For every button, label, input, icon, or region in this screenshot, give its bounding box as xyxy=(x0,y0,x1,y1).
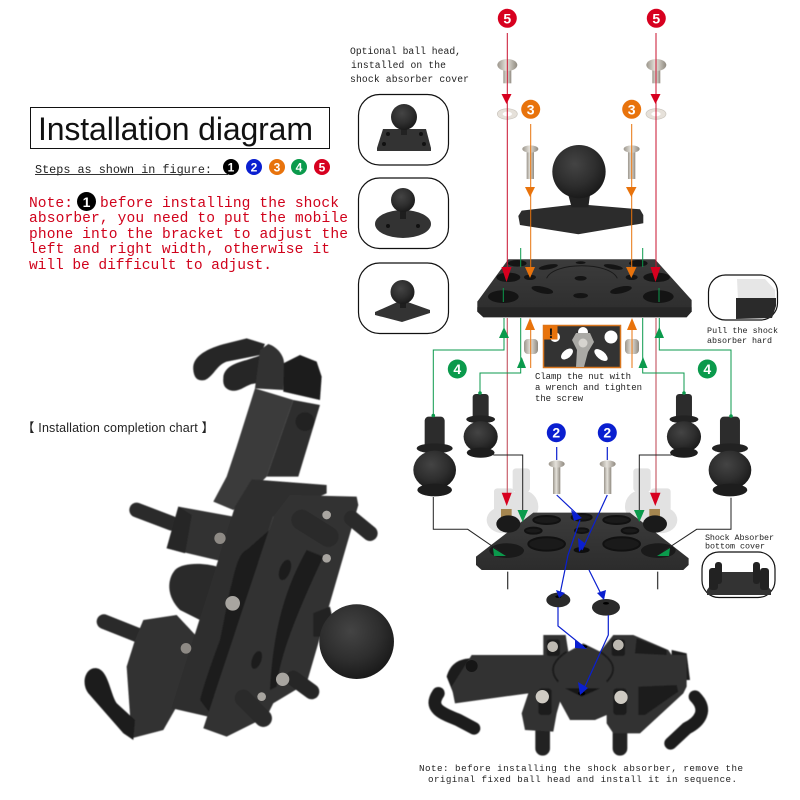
step badges on diagram: 5 xyxy=(652,10,660,26)
clamp nut caption xyxy=(535,372,642,404)
insert: shock absorber bottom cover: Shock Absorber xyxy=(705,533,774,543)
red installation note: phone into the bracket to adjust the xyxy=(29,227,348,243)
step badges on diagram: 4 xyxy=(453,361,461,377)
step badges on diagram: 2 xyxy=(603,425,611,441)
silver screws xyxy=(181,511,331,701)
ball head option: round base xyxy=(358,178,448,248)
step badges on diagram xyxy=(448,9,717,442)
red installation note: left and right width, otherwise it xyxy=(29,242,330,258)
ball head option: diamond base xyxy=(358,263,448,334)
step 2 screws xyxy=(549,460,616,494)
ghost dampers xyxy=(487,468,677,533)
step badges on diagram: 5 xyxy=(503,10,511,26)
red installation note: absorber, you need to put the mobile xyxy=(29,211,348,227)
top mounting plate xyxy=(477,259,692,317)
step badges on diagram: 2 xyxy=(552,425,560,441)
optional ball head caption: installed on the xyxy=(351,60,446,71)
insert: pull the shock absorber hard: absorber hard xyxy=(707,336,772,346)
steps legend: 2 xyxy=(251,160,258,174)
optional ball head caption: shock absorber cover xyxy=(350,74,469,85)
red installation note xyxy=(29,192,348,274)
steps legend: Steps as shown in figure: xyxy=(35,163,212,177)
insert: pull the shock absorber hard xyxy=(707,275,778,346)
rubber dampers xyxy=(413,394,751,496)
arrows: step 2 blue xyxy=(556,447,608,695)
red installation note: will be difficult to adjust. xyxy=(29,258,272,274)
optional ball head caption xyxy=(350,46,469,85)
clamp nut caption: the screw xyxy=(535,394,584,404)
insert: wrench on nut: ! xyxy=(549,325,553,341)
bottom note: Note: before installing the shock absorber, remove the xyxy=(419,763,743,774)
step badges on diagram: 3 xyxy=(527,101,535,117)
insert: shock absorber bottom cover xyxy=(702,533,775,598)
red installation note: 1 xyxy=(83,194,91,210)
steps legend: 5 xyxy=(319,160,326,174)
large ball head xyxy=(518,145,643,234)
optional ball head caption: Optional ball head, xyxy=(350,46,461,57)
rubber washers xyxy=(546,593,620,616)
insert: pull the shock absorber hard: Pull the shock xyxy=(707,326,778,336)
steps legend xyxy=(35,159,330,177)
insert: wrench on nut xyxy=(544,325,620,368)
ball head option: square base xyxy=(358,94,448,165)
step badges on diagram: 3 xyxy=(628,101,636,117)
arrows: step 3 orange xyxy=(525,124,637,368)
phone holder bracket, rear view xyxy=(435,635,702,748)
step badges on diagram: 4 xyxy=(703,361,711,377)
steps legend: 3 xyxy=(274,160,281,174)
panel: optional ball heads xyxy=(350,46,469,334)
arrows: step 4 green xyxy=(432,248,733,418)
arrows: step 5 red xyxy=(502,33,660,506)
brass standoffs and nuts xyxy=(496,509,667,533)
arrows: dampers to bottom plate xyxy=(433,455,731,556)
silver screws xyxy=(466,640,628,704)
photo: assembled phone holder xyxy=(85,338,394,740)
title: Installation diagram xyxy=(38,111,313,147)
steps legend: 1 xyxy=(228,160,235,174)
completion chart caption: 【 Installation completion chart 】 xyxy=(22,421,214,435)
shock absorber bottom plate xyxy=(476,509,689,589)
clamp nut caption: Clamp the nut with xyxy=(535,372,631,382)
soft blurred body xyxy=(85,338,370,740)
steps legend: 4 xyxy=(296,160,303,174)
red installation note: Note: xyxy=(29,196,73,212)
bottom note xyxy=(419,763,743,785)
clamp nut caption: a wrench and tighten xyxy=(535,383,642,393)
screws and washers: step 5 and 3 xyxy=(497,59,666,179)
red installation note: before installing the shock xyxy=(100,196,339,212)
bottom note: original fixed ball head and install it in sequence. xyxy=(428,774,737,785)
spacer nuts xyxy=(524,339,639,354)
insert: shock absorber bottom cover: bottom cover xyxy=(705,542,765,552)
